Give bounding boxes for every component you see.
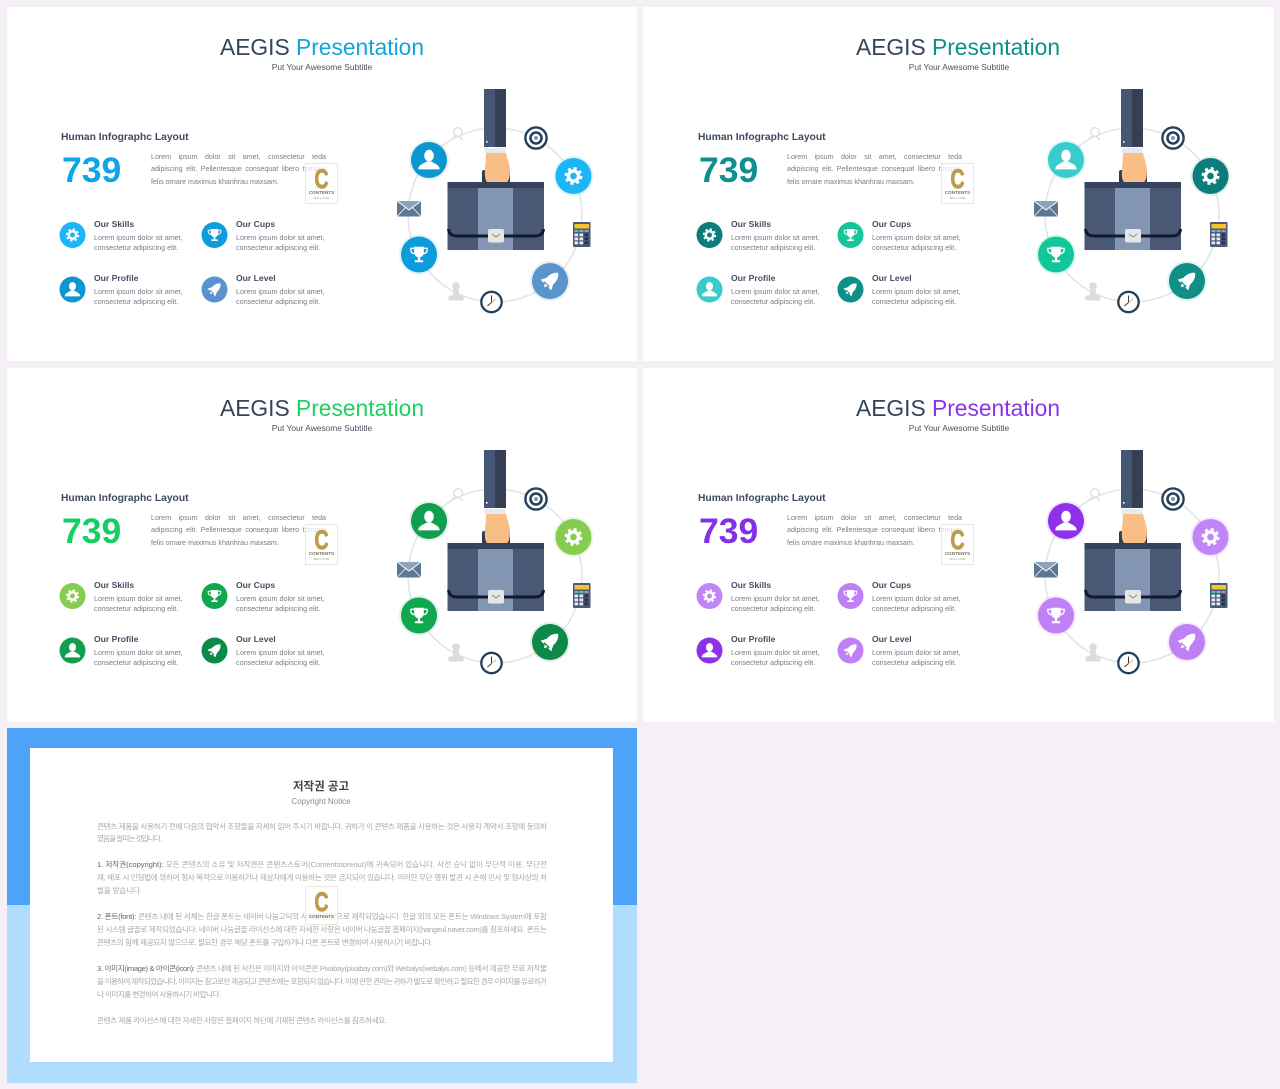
icon: clock [1118, 292, 1139, 312]
white notice card [30, 748, 613, 1062]
title: AEGIS Presentation [856, 395, 1060, 421]
icon: clock [481, 653, 502, 673]
notice body: 콘텐츠 제품 라이선스에 대한 자세한 사항은 홈페이지 하단에 기재된 콘텐츠 라이선스를 참조하세요. [97, 1015, 387, 1025]
paragraph: Lorem ipsum dolor sit amet, consectetur teda [151, 153, 326, 161]
subtitle: Put Your Awesome Subtitle [272, 423, 372, 433]
paragraph: felis ornare maximus khanhrau maxsam. [787, 178, 915, 186]
notice body: 콘텐츠 제품을 사용하기 전에 다음의 협약서 조항들을 자세히 읽어 주시기 바랍니다. 귀하가 이 콘텐츠 제품을 사용하는 것은 사용자 계약서 조항에 동의하 [97, 821, 547, 831]
paragraph: felis ornare maximus khanhrau maxsam. [151, 539, 279, 547]
sleeve [484, 450, 506, 514]
hand [482, 153, 510, 183]
item: our level [838, 634, 961, 667]
watermark logo: C [314, 164, 329, 194]
badge: rocket [1167, 261, 1207, 301]
item: our profile: consectetur adipiscing elit. [731, 658, 815, 667]
item: our profile: Lorem ipsum dolor sit amet, [94, 287, 183, 296]
icon: magnifier outline [452, 489, 463, 501]
item: our profile: Lorem ipsum dolor sit amet, [731, 648, 820, 657]
diagram: briefcase ring [397, 89, 594, 314]
watermark logo [306, 886, 338, 924]
badge: rocket [1167, 622, 1207, 662]
item: our cups: Our Cups [236, 219, 275, 229]
badge: trophy [399, 596, 439, 636]
heading: Human Infographc Layout [698, 493, 826, 504]
item: our cups: Lorem ipsum dolor sit amet, [872, 233, 961, 242]
briefcase [448, 182, 544, 250]
icon: mail [1034, 562, 1058, 578]
panel: purple slide [643, 368, 1274, 722]
item: our level: consectetur adipiscing elit. [236, 297, 320, 306]
watermark logo: MALL.COM [950, 557, 965, 561]
item: our profile [60, 273, 183, 306]
item: our skills: Lorem ipsum dolor sit amet, [731, 233, 820, 242]
item: our cups: Our Cups [236, 580, 275, 590]
background: blue upper band [7, 728, 637, 905]
subtitle: Put Your Awesome Subtitle [909, 62, 1009, 72]
item: our level: Lorem ipsum dolor sit amet, [872, 648, 961, 657]
watermark logo [941, 524, 974, 565]
item: our cups: consectetur adipiscing elit. [236, 243, 320, 252]
notice body: 콘텐츠의 함께 제공되지 않으므로, 필요한 경우 해당 폰트를 구입하거나 다른 폰트로 변경하여 사용하시기 바랍니다. [97, 937, 433, 947]
badge: rocket [530, 622, 570, 662]
item: our skills: Our Skills [94, 219, 134, 229]
item: our level: Lorem ipsum dolor sit amet, [236, 287, 325, 296]
notice heading: 저작권 공고 [293, 779, 349, 793]
hand [1119, 514, 1147, 544]
big number: 739 [699, 511, 758, 551]
item: our level [202, 273, 325, 306]
watermark logo: MALL.COM [950, 196, 965, 200]
big number: 739 [62, 511, 121, 551]
item: our skills [60, 219, 183, 252]
item: our cups: Lorem ipsum dolor sit amet, [872, 594, 961, 603]
ring [408, 128, 582, 302]
item: our skills: Lorem ipsum dolor sit amet, [731, 594, 820, 603]
notice body: 을 이용하여 제작되었습니다. 이미지는 참고로만 제공되고 콘텐츠에는 포함되지 않습니다. 이에 관한 권리는 귀하가 별도로 확인하고 필요한 경우 이미지를 유료하거 [97, 976, 547, 986]
badge: gear [554, 517, 594, 557]
notice body: 나 이미지를 변경하여 사용하시기 바랍니다. [97, 989, 221, 999]
item: our cups: Lorem ipsum dolor sit amet, [236, 233, 325, 242]
icon: calculator [573, 222, 590, 247]
icon: mail [397, 201, 421, 216]
paragraph: adipiscing elit. Pellentesque consequat libero tempus [787, 165, 962, 173]
sleeve [484, 89, 506, 153]
icon: magnifier outline [1089, 128, 1100, 140]
notice body: 된 시스템 글꼴로 제작되었습니다. 네이버 나눔글꼴 라이선스에 대한 자세한 사항은 네이버 나눔글꼴 홈페이지(hangeul.naver.com)를 참조하세요. 폰트는 [97, 924, 547, 934]
panel: green slide [7, 368, 637, 722]
item: our profile [696, 273, 820, 306]
paragraph: adipiscing elit. Pellentesque consequat libero tempus [151, 165, 326, 173]
heading: Human Infographc Layout [61, 132, 189, 143]
item: our level: Our Level [236, 273, 276, 283]
icon: calculator [573, 583, 590, 608]
badge: person [1046, 501, 1086, 541]
ring [1045, 489, 1219, 663]
icon: clock [481, 292, 502, 312]
item: our profile: Our Profile [731, 634, 775, 644]
icon: target [1162, 127, 1184, 149]
title: AEGIS Presentation [856, 34, 1060, 60]
heading: Human Infographc Layout [61, 493, 189, 504]
briefcase [448, 543, 544, 611]
notice body: 벌을 받습니다. [97, 885, 142, 895]
item: our level: Our Level [872, 634, 912, 644]
badge: person [409, 140, 449, 180]
ring [408, 489, 582, 663]
notice body: 2. 폰트(font): 콘텐츠 내에 된 서체는 한글 폰트는 네이버 나눔고딕의 서체를 무상으로 제작되었습니다. 한글 외의 모든 폰트는 Windows System에 포함 [97, 911, 547, 921]
item: our cups [838, 580, 961, 613]
watermark logo [305, 524, 338, 565]
item: our level: Our Level [872, 273, 912, 283]
ring [1045, 128, 1219, 302]
hand [1119, 153, 1147, 183]
watermark logo: CONTENTS [309, 551, 334, 556]
paragraph: felis ornare maximus khanhrau maxsam. [787, 539, 915, 547]
paragraph: adipiscing elit. Pellentesque consequat libero tempus [151, 526, 326, 534]
title: AEGIS Presentation [220, 34, 424, 60]
item: our skills: consectetur adipiscing elit. [731, 604, 815, 613]
badge: gear [1190, 517, 1230, 557]
notice body: 였음을 알리는 것입니다. [97, 833, 162, 843]
item: our cups [838, 219, 961, 252]
item: our skills [60, 580, 183, 613]
item: our level: Our Level [236, 634, 276, 644]
item: our skills: Our Skills [731, 219, 771, 229]
paragraph [151, 153, 326, 186]
sleeve [1121, 450, 1143, 514]
icon: calculator [1210, 583, 1228, 608]
item: our level: Lorem ipsum dolor sit amet, [236, 648, 325, 657]
item: our profile: consectetur adipiscing elit. [94, 658, 178, 667]
paragraph: adipiscing elit. Pellentesque consequat libero tempus [787, 526, 962, 534]
item: our profile: Our Profile [94, 273, 138, 283]
icon: stamp [448, 282, 464, 300]
watermark logo: C [950, 164, 965, 194]
hand [482, 514, 510, 544]
item: our cups: Our Cups [872, 580, 911, 590]
badge: trophy [399, 234, 439, 274]
badge: gear [1190, 156, 1230, 196]
watermark logo: CONTENTS [945, 190, 970, 195]
big number: 739 [699, 150, 758, 190]
item: our skills: Our Skills [94, 580, 134, 590]
badge: person [409, 501, 449, 541]
item: our profile: Our Profile [731, 273, 775, 283]
briefcase [1084, 543, 1181, 611]
subtitle: Put Your Awesome Subtitle [272, 62, 372, 72]
item: our level: Lorem ipsum dolor sit amet, [872, 287, 961, 296]
item: our profile: consectetur adipiscing elit. [94, 297, 178, 306]
title: AEGIS Presentation [220, 395, 424, 421]
notice body: 재, 배포 시 민형법에 의하여 형사 목적으로 이용하거나 제삼자에게 이용하는 것은 금지되어 있습니다. 이러한 무단 행위 발견 시 손해 민사 및 형사상의 처 [97, 872, 547, 882]
watermark logo: MALL.COM [314, 557, 329, 561]
paragraph: Lorem ipsum dolor sit amet, consectetur teda [151, 514, 326, 522]
item: our profile [60, 634, 183, 667]
watermark logo: C [314, 525, 329, 555]
watermark logo: CONTENTS [945, 551, 970, 556]
item: our level [838, 273, 961, 306]
item: our profile: Lorem ipsum dolor sit amet, [731, 287, 820, 296]
watermark logo: CONTENTS [309, 914, 334, 919]
item: our level [202, 634, 325, 667]
panel: blue slide [7, 7, 637, 361]
item: our cups: Lorem ipsum dolor sit amet, [236, 594, 325, 603]
item: our level: consectetur adipiscing elit. [872, 658, 956, 667]
item: our profile: Our Profile [94, 634, 138, 644]
item: our level: consectetur adipiscing elit. [236, 658, 320, 667]
badge: person [1046, 140, 1086, 180]
notice body: 3. 이미지(image) & 아이콘(icon): 콘텐츠 내에 된 사진은 이미지와 아이콘은 Pixabay(pixabay.com)와 Webalys(webalys.com) 등에서 제공한 무료 저작물 [97, 963, 547, 973]
icon: magnifier outline [1089, 489, 1100, 501]
item: our cups [202, 580, 325, 613]
icon: clock [1118, 653, 1139, 673]
panel: teal slide [643, 7, 1274, 361]
watermark logo [305, 163, 338, 204]
badge: trophy [1036, 596, 1076, 636]
icon: target [525, 127, 547, 149]
notice body [97, 821, 547, 1025]
item: our cups: consectetur adipiscing elit. [872, 604, 956, 613]
diagram: briefcase ring [1034, 450, 1230, 674]
paragraph [151, 514, 326, 547]
paragraph: felis ornare maximus khanhrau maxsam. [151, 178, 279, 186]
paragraph [787, 153, 962, 186]
icon: calculator [1210, 222, 1228, 247]
diagram: briefcase ring [397, 450, 594, 674]
badge: rocket [530, 261, 570, 301]
item: our skills: Lorem ipsum dolor sit amet, [94, 594, 183, 603]
icon: mail [1034, 201, 1058, 216]
item: our skills: Lorem ipsum dolor sit amet, [94, 233, 183, 242]
icon: target [1162, 488, 1184, 510]
notice subtitle: Copyright Notice [291, 797, 351, 806]
watermark logo: CONTENTS [309, 190, 334, 195]
background: light blue lower band [7, 905, 637, 1083]
item: our profile: Lorem ipsum dolor sit amet, [94, 648, 183, 657]
item: our level: consectetur adipiscing elit. [872, 297, 956, 306]
subtitle: Put Your Awesome Subtitle [909, 423, 1009, 433]
big number: 739 [62, 150, 121, 190]
icon: stamp [448, 643, 464, 662]
briefcase [1084, 182, 1181, 250]
icon: stamp [1086, 282, 1100, 300]
watermark logo: C [314, 887, 329, 917]
paragraph: Lorem ipsum dolor sit amet, consectetur teda [787, 514, 962, 522]
icon: mail [397, 562, 421, 578]
paragraph: Lorem ipsum dolor sit amet, consectetur teda [787, 153, 962, 161]
diagram: briefcase ring [1034, 89, 1230, 314]
item: our cups: consectetur adipiscing elit. [236, 604, 320, 613]
badge: gear [554, 156, 594, 196]
item: our profile [696, 634, 820, 667]
item: our skills: consectetur adipiscing elit. [731, 243, 815, 252]
item: our skills [696, 219, 820, 252]
item: our cups [202, 219, 325, 252]
heading: Human Infographc Layout [698, 132, 826, 143]
icon: stamp [1086, 643, 1100, 662]
item: our cups: Our Cups [872, 219, 911, 229]
sleeve [1121, 89, 1143, 153]
item: our skills: consectetur adipiscing elit. [94, 243, 178, 252]
item: our skills: consectetur adipiscing elit. [94, 604, 178, 613]
item: our skills [696, 580, 820, 613]
watermark logo: MALL.COM [314, 196, 329, 200]
icon: target [525, 488, 547, 510]
item: our cups: consectetur adipiscing elit. [872, 243, 956, 252]
panel: copyright notice [7, 728, 637, 1083]
notice body: 1. 저작권(copyright): 모든 콘텐츠의 소유 및 저작권은 콘텐츠스토어(Contentstoreout)에 귀속되어 있습니다. 사전 승낙 없이 무단적 이용, 무단전 [97, 859, 547, 869]
paragraph [787, 514, 962, 547]
badge: trophy [1036, 234, 1076, 274]
watermark logo: C [950, 525, 965, 555]
item: our profile: consectetur adipiscing elit. [731, 297, 815, 306]
watermark logo [941, 163, 974, 204]
item: our skills: Our Skills [731, 580, 771, 590]
icon: magnifier outline [452, 128, 463, 140]
